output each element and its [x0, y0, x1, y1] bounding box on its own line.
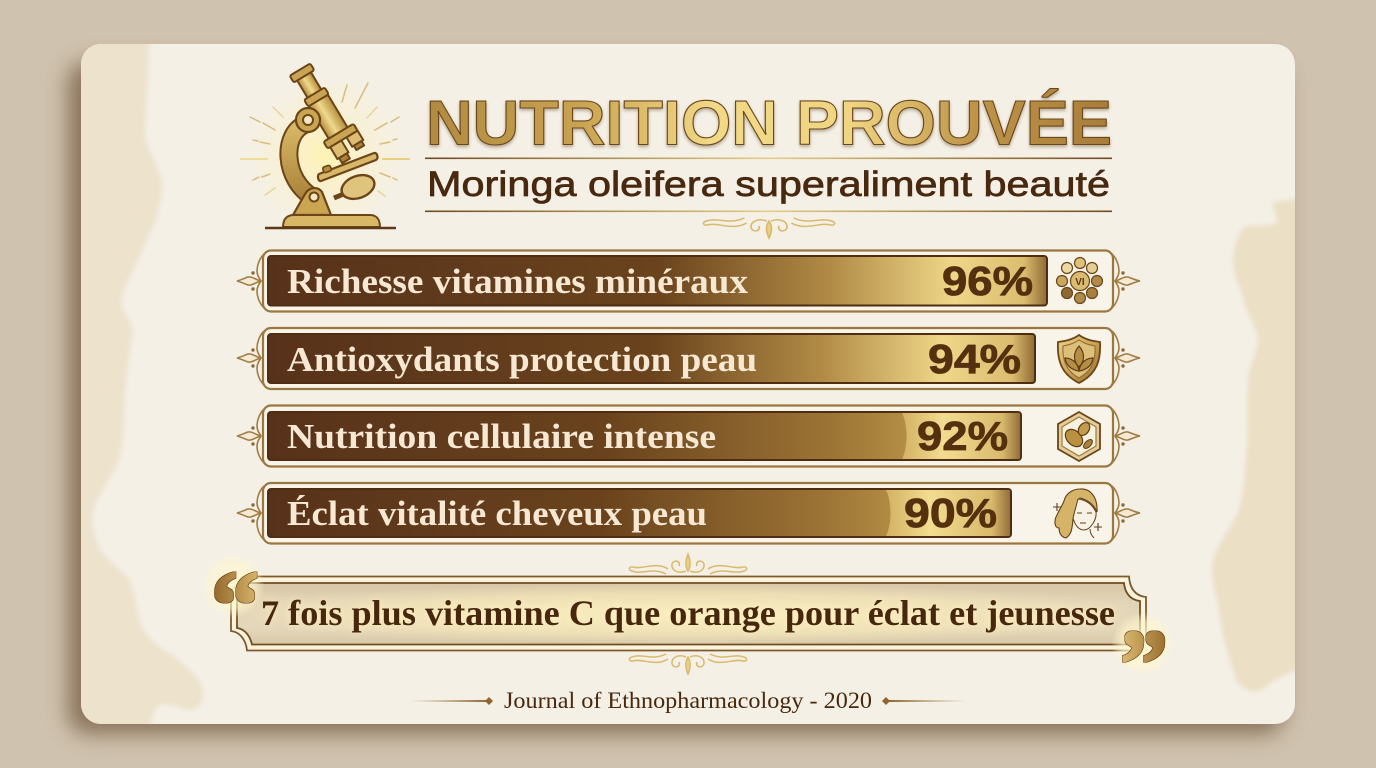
opening quote mark: “	[211, 551, 259, 658]
row ornament right	[1112, 331, 1140, 385]
value: 90%	[904, 490, 997, 536]
right rule	[888, 700, 966, 702]
bar highlight end	[902, 413, 1020, 459]
row 3: cellular nutrition	[237, 406, 1140, 466]
subtitle rule	[425, 210, 1112, 212]
watercolor stain left	[81, 44, 204, 724]
row 1: vitamins and minerals	[237, 250, 1140, 312]
subtitle: Moringa oleifera superaliment beauté	[427, 165, 1110, 204]
header illustration: microscope	[241, 60, 409, 233]
closing quote mark: ”	[1120, 610, 1168, 717]
inner panel	[237, 583, 1140, 644]
row ornament left	[237, 331, 264, 385]
row frame	[263, 406, 1113, 466]
left rule	[410, 700, 488, 702]
mirror	[334, 193, 346, 198]
icon: woman with wavy hair	[1053, 489, 1102, 538]
row 4: hair and skin	[237, 483, 1140, 544]
icon: shield with leaves	[1058, 335, 1100, 383]
row ornament right	[1112, 409, 1140, 463]
stand arm	[289, 124, 314, 198]
light rays	[241, 83, 409, 196]
quote ornament top	[629, 554, 747, 574]
label: Éclat vitalité cheveux peau	[287, 494, 707, 533]
glow behind microscope	[247, 77, 403, 233]
value: 96%	[942, 258, 1033, 304]
source text: Journal of Ethnopharmacology - 2020	[504, 688, 872, 713]
label: Antioxydants protection peau	[287, 340, 757, 379]
quote panel	[201, 551, 1175, 717]
quote ornament bottom	[629, 654, 747, 674]
stage	[318, 153, 377, 181]
bar 90%	[268, 489, 1011, 537]
value: 94%	[928, 336, 1021, 382]
row 2: antioxidants	[237, 328, 1140, 389]
bar 96%	[268, 256, 1047, 306]
row frame	[263, 483, 1113, 544]
value: 92%	[917, 413, 1008, 459]
icon: nutrient circles	[1056, 258, 1102, 304]
bar 92%	[268, 412, 1021, 460]
label: Nutrition cellulaire intense	[287, 417, 716, 456]
icon: nutrient circles: VI	[1075, 277, 1085, 288]
source line	[410, 688, 966, 713]
label: Richesse vitamines minéraux	[287, 262, 749, 301]
watercolor stain right	[1212, 198, 1305, 691]
quote text: 7 fois plus vitamine C que orange pour éclat et jeunesse	[261, 593, 1115, 633]
foot	[293, 188, 331, 215]
row ornament right	[1112, 486, 1140, 540]
header flourish	[703, 218, 835, 238]
title rule	[425, 158, 1112, 159]
right diamond	[882, 697, 890, 705]
row ornament left	[237, 409, 264, 463]
title: NUTRITION PROUVÉE	[426, 88, 1112, 158]
outer frame	[231, 576, 1146, 650]
row frame	[263, 250, 1113, 312]
icon: cell in hexagon	[1058, 412, 1100, 461]
bar 94%	[268, 334, 1035, 383]
row ornament left	[237, 254, 264, 308]
optical tube	[285, 60, 368, 166]
card shadow	[68, 62, 1284, 734]
row ornament right	[1112, 254, 1140, 308]
base	[283, 215, 380, 227]
central glow	[218, 583, 1158, 645]
focus knob	[296, 108, 320, 132]
row ornament left	[237, 486, 264, 540]
bar highlight end	[886, 490, 1010, 536]
left diamond	[485, 697, 493, 705]
row frame	[263, 328, 1113, 389]
